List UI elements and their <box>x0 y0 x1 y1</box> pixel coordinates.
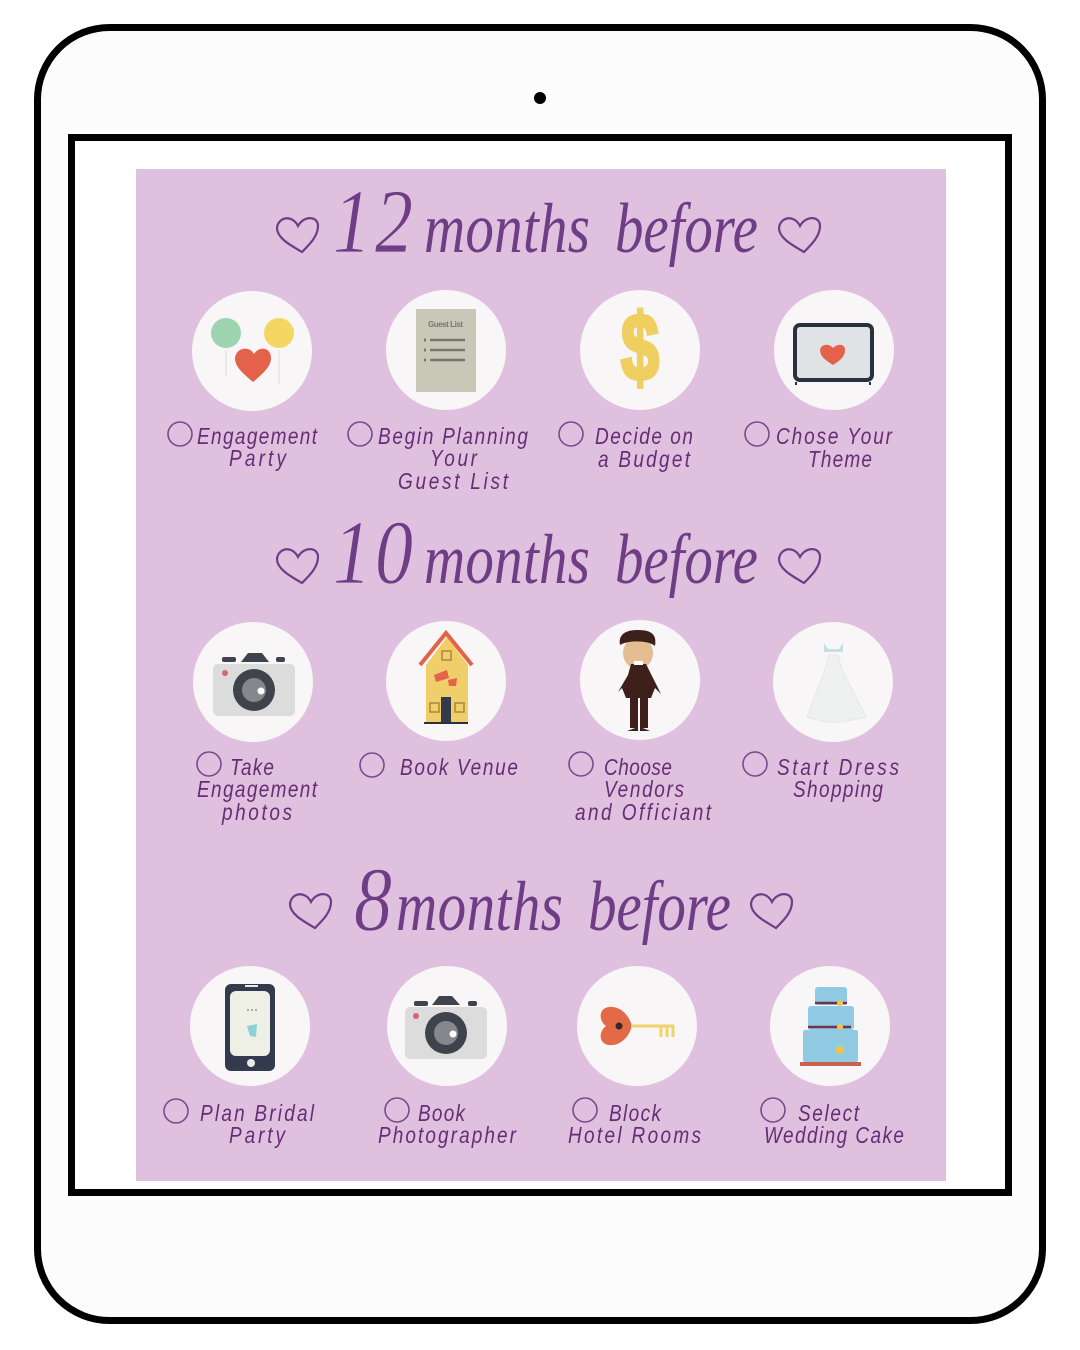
heading: 10 months before: months <box>424 520 590 598</box>
icon: dollar sign: $ <box>621 294 659 401</box>
heading: 12 months before: months <box>424 189 590 267</box>
item: wedding cake <box>761 966 904 1148</box>
icon: smartphone <box>225 984 275 1071</box>
item: book photographer <box>378 966 517 1148</box>
checkbox <box>360 753 384 777</box>
heading: 8 months before: 8 <box>354 850 392 951</box>
label: Theme <box>808 447 872 472</box>
label: Plan Bridal <box>200 1101 315 1126</box>
label: Engagement <box>197 777 318 802</box>
heading: 8 months before: before <box>588 867 731 945</box>
icon: guest list paper <box>416 309 476 392</box>
heading: 12 months before <box>277 172 820 273</box>
label: Shopping <box>793 777 883 802</box>
heading: 10 months before <box>277 503 820 604</box>
tablet screen <box>72 138 1008 1192</box>
item: venue <box>360 621 518 780</box>
label: Begin Planning <box>378 424 528 449</box>
label: Your <box>430 446 478 471</box>
label: Vendors <box>604 777 684 802</box>
heading: 8 months before: months <box>396 867 563 945</box>
heading: 12 months before: before <box>615 189 758 267</box>
item: dress shopping <box>743 622 899 802</box>
heading: 10 months before: 1 <box>333 503 371 604</box>
checkbox <box>348 422 372 446</box>
checkbox <box>745 422 769 446</box>
label: Book Venue <box>400 755 518 780</box>
label: Party <box>229 1123 286 1148</box>
item: vendors and officiant <box>569 620 712 825</box>
item: theme <box>745 290 894 472</box>
label: Hotel Rooms <box>568 1123 701 1148</box>
checkbox <box>573 1098 597 1122</box>
heading: 12 months before: 2 <box>375 172 413 273</box>
icon: tiered cake <box>800 987 861 1066</box>
icon: camera <box>213 653 295 716</box>
icon: balloons <box>211 318 294 385</box>
checkbox <box>743 752 767 776</box>
label: Start Dress <box>777 755 899 780</box>
panel: wedding checklist <box>136 169 946 1181</box>
label: Choose <box>604 755 672 780</box>
label: Block <box>609 1101 662 1126</box>
item: bridal party <box>164 966 315 1148</box>
icon: house <box>420 633 472 723</box>
checkbox <box>559 422 583 446</box>
checkbox <box>569 752 593 776</box>
label: Select <box>798 1101 860 1126</box>
label: Take <box>230 755 274 780</box>
icon: officiant <box>618 630 661 731</box>
item: engagement photos <box>193 622 318 825</box>
checkbox <box>385 1098 409 1122</box>
checkbox <box>197 752 221 776</box>
icon: screen with heart <box>795 325 872 385</box>
tablet camera dot <box>534 92 546 104</box>
icon: camera <box>405 996 487 1059</box>
label: Engagement <box>197 424 318 449</box>
label: Photographer <box>378 1123 517 1148</box>
item: budget <box>559 290 700 472</box>
heading: 10 months before: 0 <box>375 503 413 604</box>
checkbox <box>761 1098 785 1122</box>
label: Chose Your <box>776 424 893 449</box>
label: Wedding Cake <box>764 1123 904 1148</box>
label: Book <box>418 1101 466 1126</box>
label: Guest List <box>398 469 509 494</box>
icon: wedding dress <box>807 643 866 722</box>
label: and Officiant <box>575 800 712 825</box>
label: Decide on <box>595 424 693 449</box>
heading: 12 months before: 1 <box>333 172 371 273</box>
icon: guest list paper: Guest List <box>428 320 463 329</box>
checkbox <box>168 422 192 446</box>
label: photos <box>221 800 292 825</box>
heading: 8 months before <box>290 850 792 951</box>
icon: heart key <box>601 1007 674 1045</box>
item: engagement party <box>168 291 318 471</box>
item: hotel rooms <box>568 966 701 1148</box>
item: guest list <box>348 290 528 494</box>
heading: 10 months before: before <box>615 520 758 598</box>
label: Party <box>229 446 287 471</box>
label: a Budget <box>598 447 691 472</box>
checkbox <box>164 1099 188 1123</box>
